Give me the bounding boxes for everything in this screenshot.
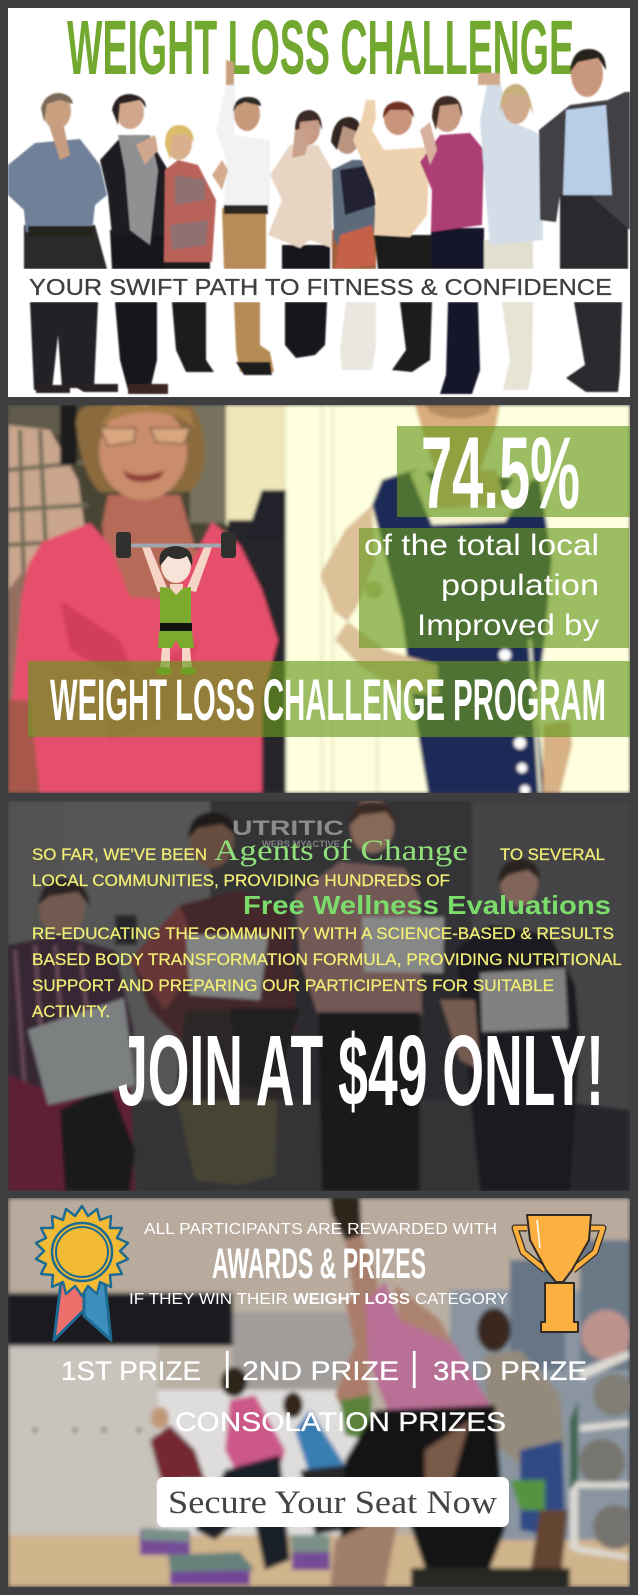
- prize list: 2ND PRIZE: [242, 1356, 399, 1386]
- icon: trophy: [515, 1215, 603, 1332]
- panel: team header: [8, 5, 630, 397]
- condition line: WEIGHT LOSS: [293, 1291, 410, 1308]
- prize list: 3RD PRIZE: [433, 1356, 587, 1386]
- prize list: 1ST PRIZE: [61, 1356, 201, 1386]
- body copy: BASED BODY TRANSFORMATION FORMULA, PROVIDING NUTRITIONAL: [32, 951, 622, 969]
- body copy: ACTIVITY.: [32, 1003, 110, 1021]
- highlight: free wellness evaluations: Free Wellness Evaluations: [243, 890, 611, 920]
- photo: cheering team: [8, 49, 630, 394]
- photo: step class in gym: [8, 1198, 637, 1587]
- condition line: IF THEY WIN THEIR: [129, 1291, 288, 1308]
- call to action button: Secure Your Seat Now: [168, 1485, 497, 1521]
- body copy: RE-EDUCATING THE COMMUNITY WITH A SCIENCE-BASED & RESULTS: [32, 925, 614, 943]
- program overlay box: [28, 661, 630, 737]
- condition line: CATEGORY: [415, 1291, 508, 1308]
- tagline band: [8, 269, 630, 302]
- prize list: [61, 1351, 587, 1437]
- body copy: SO FAR, WE'VE BEEN: [32, 846, 207, 864]
- dim overlay: [8, 1198, 630, 1587]
- statistic caption: [364, 529, 599, 642]
- photo: before and after: [8, 404, 630, 795]
- stat overlay box: [397, 426, 630, 517]
- intro line: ALL PARTICIPANTS ARE REWARDED WITH: [144, 1221, 497, 1238]
- rosette: [36, 1206, 128, 1296]
- highlight: agents of change: Agents of Change: [214, 834, 468, 867]
- panel: community outreach: [8, 799, 630, 1191]
- dim overlay: [32, 814, 564, 1101]
- wall sign lettering: WERS MYACTIVE: [262, 839, 340, 849]
- body copy: [32, 834, 622, 1021]
- icon: award ribbon: [36, 1206, 128, 1340]
- ribbon tail left: [54, 1282, 84, 1340]
- photo: participants with certificates: [8, 799, 630, 1191]
- ribbon tail right: [84, 1282, 111, 1340]
- text overlay box: [359, 528, 629, 648]
- wall sign lettering: [234, 820, 344, 847]
- body copy: LOCAL COMMUNITIES, PROVIDING HUNDREDS OF: [32, 872, 450, 890]
- weightlifter icon: [116, 532, 236, 675]
- man on right: [477, 1308, 511, 1352]
- statistic caption: Improved by: [417, 609, 599, 642]
- wall sign lettering: UTRITIC: [232, 817, 344, 840]
- background participants: [148, 1423, 207, 1481]
- panel: before and after statistic: [8, 404, 630, 795]
- woman foreground: [330, 1198, 362, 1245]
- body copy: SUPPORT AND PREPARING OUR PARTICIPENTS FOR SUITABLE: [32, 977, 554, 995]
- heading: awards and prizes: AWARDS & PRIZES: [212, 1240, 426, 1288]
- tagline band: YOUR SWIFT PATH TO FITNESS & CONFIDENCE: [29, 274, 612, 300]
- panel: awards and prizes: [8, 1198, 637, 1587]
- condition line: [130, 1293, 508, 1304]
- call to action button: [157, 1477, 509, 1527]
- prize list: CONSOLATION PRIZES: [175, 1407, 506, 1437]
- statistic caption: population: [441, 569, 599, 602]
- body copy: TO SEVERAL: [500, 846, 605, 864]
- statistic caption: of the total local: [364, 529, 599, 562]
